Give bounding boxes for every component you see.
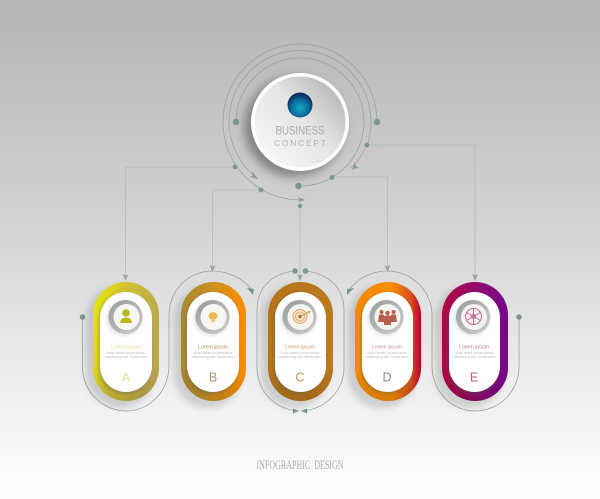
icon badge: group of people [368,300,404,336]
card B text: Nost amet,consectetur [194,350,233,355]
card E text: Lorem ipsum [459,344,489,350]
icon badge: target [280,300,316,336]
card C text: Nost amet,consectetur [281,350,320,355]
card E text: adipiscing elit. Nulla sem [453,354,495,359]
card A text: Nost amet,consectetur [107,350,146,355]
hub title [274,126,326,148]
card B text: adipiscing elit. Nulla sem [192,354,234,359]
connector lines from hub to cards [122,145,478,281]
card D [348,282,421,408]
card B text: Lorem ipsum [198,344,228,350]
card E text: E [470,370,478,384]
card A text: A [122,370,131,384]
swoop: C right [304,271,344,411]
swoop arrowheads and dots [80,268,522,414]
card C [261,282,333,408]
hub orbit dots [233,119,380,208]
card A text [105,344,147,384]
card E text: Nost amet,consectetur [455,350,494,355]
card C text [279,344,321,384]
central hub disc [244,73,349,177]
footer title: INFOGRAPHIC DESIGN [256,458,344,472]
card D text [366,344,408,384]
icon badge: wheel [454,300,490,336]
card B text [192,344,234,384]
card C text: adipiscing elit. Nulla sem [279,354,321,359]
card E [435,282,508,408]
icon badge: speech bubble [194,300,230,336]
card D text: Lorem ipsum [372,344,402,350]
hub title: CONCEPT [274,138,326,148]
card D text: Nost amet,consectetur [368,350,407,355]
swoop: C left [257,271,296,411]
swoop: A to B [82,271,252,411]
icon: globe [288,92,312,118]
icon badge: person [106,300,142,336]
card B [174,282,246,408]
card C text: C [295,370,305,384]
card B text: B [209,370,217,384]
card A text: adipiscing elit. Nulla sem [105,354,147,359]
card E text [453,344,495,384]
card A [86,282,159,408]
card D text: D [382,370,392,384]
hub title: BUSINESS [276,126,325,138]
swoop: D to E [349,271,519,411]
card C text: Lorem ipsum [285,344,315,350]
card D text: adipiscing elit. Nulla sem [366,354,408,359]
card A text: Lorem ipsum [111,344,141,350]
hub orbit arcs [223,44,377,202]
